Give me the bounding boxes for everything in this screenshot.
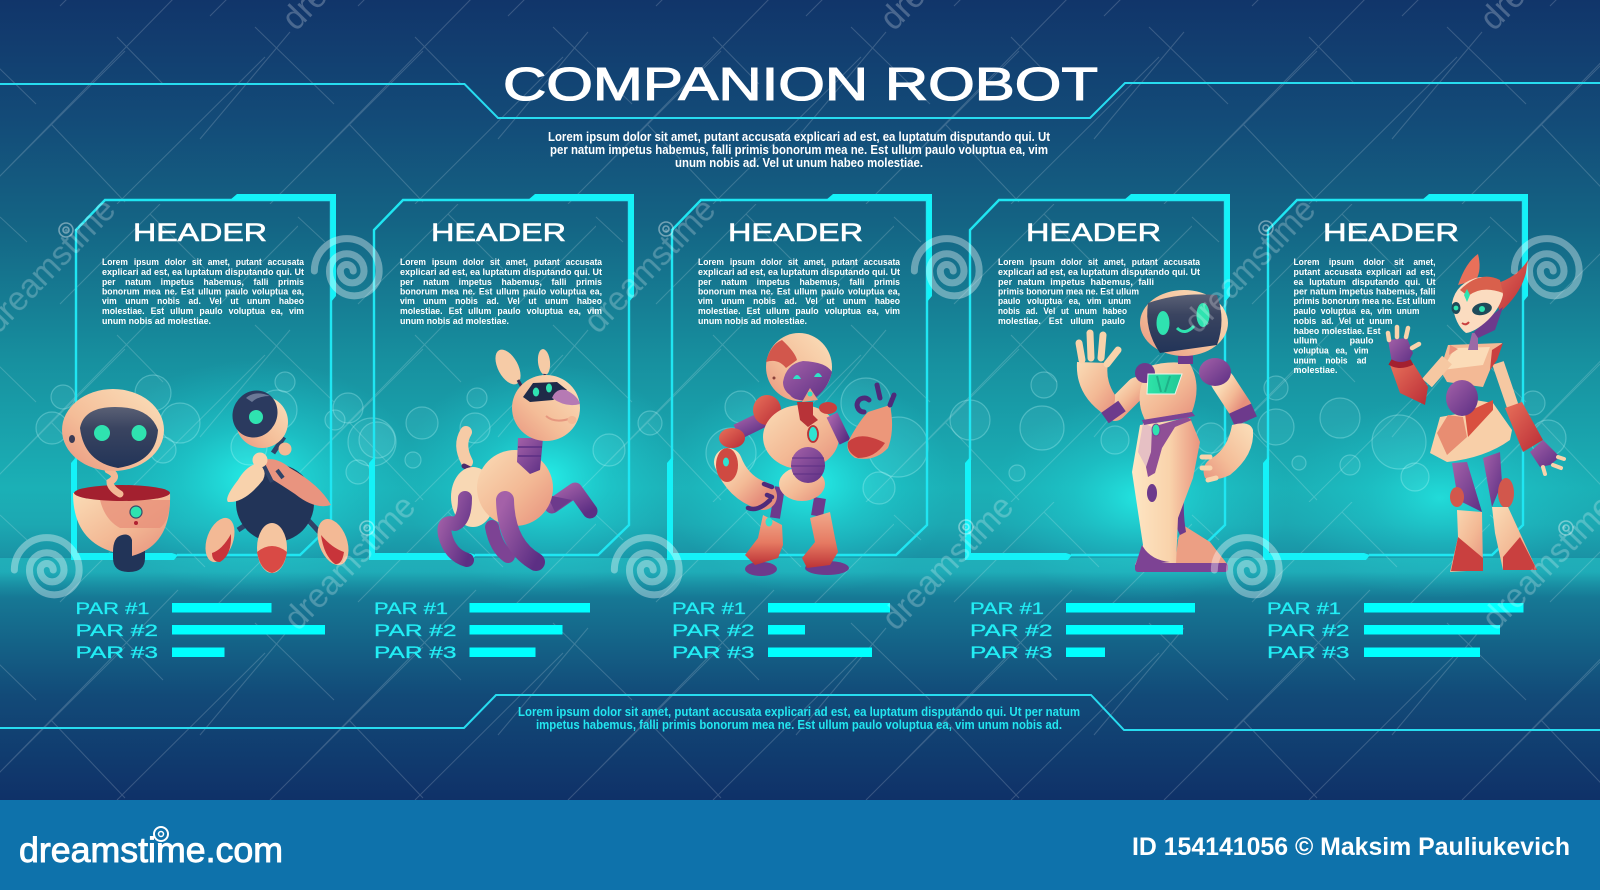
head xyxy=(1140,290,1228,356)
footer logo: dreamstime.com xyxy=(19,831,283,870)
panel 5: text block: putant accusata explicari ad est, xyxy=(1294,267,1436,278)
panel 4: header: HEADER xyxy=(1026,219,1161,247)
panel 3: text block: molestiae. Est ullum paulo voluptua ea, vim xyxy=(698,306,900,317)
panel 1: text block xyxy=(102,257,305,327)
hips xyxy=(779,467,825,501)
wheel xyxy=(113,530,145,572)
panel 2: text block xyxy=(400,257,603,327)
right arm xyxy=(1223,382,1240,408)
panel 4: text block: explicari ad est, ea luptatum disputando qui. Ut xyxy=(998,267,1201,278)
bokeh circles xyxy=(36,372,1566,504)
shell wings xyxy=(260,459,331,506)
panel 5: parameter chart: PAR #3 xyxy=(1267,643,1350,662)
panel 2: text block: vim unum nobis ad. Vel ut unum habeo xyxy=(400,296,602,307)
skirt xyxy=(1430,400,1512,462)
ears xyxy=(1458,254,1480,285)
panel 1: header: HEADER xyxy=(133,219,267,247)
panel 2: text block: explicari ad est, ea luptatum disputando qui. Ut xyxy=(400,267,603,278)
head xyxy=(1474,307,1503,338)
panel 4: parameter chart: PAR #1 xyxy=(970,599,1044,618)
legs xyxy=(238,515,322,548)
panel 1: parameter chart: PAR #2 xyxy=(76,621,158,640)
bottom text: Lorem ipsum dolor sit amet, putant accusata explicari ad est, ea luptatum disputando qui. Ut per natum xyxy=(518,705,1080,719)
panel 5: text block: voluptua ea, vim xyxy=(1294,346,1368,356)
panel 3: parameter chart xyxy=(672,599,890,662)
panel 2: parameter chart: PAR #1 xyxy=(374,599,448,618)
panel 5: text block: ea luptatum disputando qui. Ut xyxy=(1294,277,1436,288)
panel 5: text block: nobis ad. Vel ut unum xyxy=(1294,316,1392,327)
panel 1: text block: molestiae. Est ullum paulo voluptua ea, vim xyxy=(102,306,304,317)
panel 3: text block: per natum impetus habemus, falli primis xyxy=(698,277,900,288)
bottom text: impetus habemus, falli primis bonorum mea ne. Est ullum paulo voluptua ea, vim unum nobis ad. xyxy=(536,718,1062,732)
panel 3: text block xyxy=(698,257,901,327)
panel 5: text block: paulo voluptua ea, vim unum xyxy=(1294,306,1420,317)
neck xyxy=(108,470,120,494)
panel 5: text block: habeo molestiae. Est xyxy=(1294,326,1381,337)
panel 1: parameter chart xyxy=(76,599,325,662)
panel 1: text block: Lorem ipsum dolor sit amet, putant accusata xyxy=(102,257,305,268)
panel 4: text block: primis bonorum mea ne. Est ullum xyxy=(998,286,1139,298)
panel 2: header: HEADER xyxy=(431,219,566,247)
head xyxy=(512,375,580,441)
panel 1: text block: bonorum mea ne. Est ullum paulo voluptua ea, xyxy=(102,286,304,298)
body xyxy=(236,464,314,542)
neck xyxy=(1178,348,1193,364)
panel 1: parameter chart: PAR #3 xyxy=(76,643,158,662)
watermark wordmarks: dreamstime xyxy=(276,487,423,638)
panel 4: text block: per natum impetus habemus, falli xyxy=(998,277,1154,288)
panel 5: frame xyxy=(1263,194,1528,560)
panel 4: text block: Lorem ipsum dolor sit amet, putant accusata xyxy=(998,257,1201,268)
floor light band xyxy=(0,558,1600,598)
background glows xyxy=(90,360,1600,603)
robot 2: robot dog xyxy=(444,346,590,562)
panel 1: text block: vim unum nobis ad. Vel ut unum habeo xyxy=(102,296,304,307)
torso xyxy=(1440,343,1502,387)
robot 3: humanoid robot xyxy=(716,333,894,576)
panel 2: frame xyxy=(369,194,634,560)
feet xyxy=(200,514,240,566)
panel 5: text block xyxy=(1294,257,1436,376)
panel 4: frame xyxy=(965,194,1230,560)
lower body xyxy=(1175,525,1228,565)
panel 2: text block: Lorem ipsum dolor sit amet, putant accusata xyxy=(400,257,603,268)
panel 4: text block: paulo voluptua ea, vim unum xyxy=(998,296,1131,307)
panel 2: parameter chart: PAR #3 xyxy=(374,643,456,662)
panel 4: text block: molestiae. Est ullum paulo xyxy=(998,316,1125,327)
panel 2: text block: bonorum mea ne. Est ullum paulo voluptua ea, xyxy=(400,286,602,298)
panel 5: text block: ullum paulo xyxy=(1294,336,1374,346)
right arm xyxy=(1498,363,1513,407)
head xyxy=(766,333,832,401)
watermark wordmarks: dreamstime xyxy=(874,487,1021,638)
panel 1: text block: per natum impetus habemus, falli primis xyxy=(102,277,304,288)
bottom text xyxy=(518,705,1080,732)
ears xyxy=(490,346,526,388)
panel 1: text block: explicari ad est, ea luptatum disputando qui. Ut xyxy=(102,267,305,278)
panel 5: header: HEADER xyxy=(1323,219,1459,247)
left arm xyxy=(1427,360,1447,383)
head xyxy=(236,396,288,448)
torso xyxy=(763,405,839,469)
intro text xyxy=(548,130,1051,170)
neck xyxy=(517,438,543,474)
robot 1b: spider robot xyxy=(200,382,354,573)
near legs xyxy=(505,500,536,562)
panel 3: parameter chart: PAR #3 xyxy=(672,643,754,662)
panel 2: text block: unum nobis ad molestiae. xyxy=(400,316,509,327)
panel 4: parameter chart xyxy=(970,599,1195,662)
panel 3: text block: unum nobis ad molestiae. xyxy=(698,316,807,327)
panel 3: header: HEADER xyxy=(728,219,863,247)
panel 5: text block: molestiae. xyxy=(1294,365,1338,376)
watermark wordmarks: dreamstime xyxy=(1176,190,1323,341)
head xyxy=(62,389,164,471)
panel 2: parameter chart: PAR #2 xyxy=(374,621,456,640)
panel 5: parameter chart xyxy=(1267,599,1524,662)
torso xyxy=(1140,362,1197,420)
robot 5: female android xyxy=(1388,254,1564,572)
intro text: per natum impetus habemus, falli primis bonorum mea ne. Est ullum paulo voluptua ea, vim xyxy=(550,143,1048,157)
panel 1: parameter chart: PAR #1 xyxy=(76,599,150,618)
far legs xyxy=(492,527,508,556)
neck xyxy=(273,437,284,453)
panel 5: text block: unum nobis ad xyxy=(1294,356,1367,366)
body xyxy=(451,467,495,527)
footer bar xyxy=(0,800,1600,890)
panel 3: text block: bonorum mea ne. Est ullum paulo voluptua ea, xyxy=(698,286,900,298)
panel 3: text block: vim unum nobis ad. Vel ut unum habeo xyxy=(698,296,900,307)
panel 4: text block xyxy=(998,257,1201,327)
watermark spirals xyxy=(14,0,1579,595)
bottom frame line xyxy=(0,695,1600,730)
legs xyxy=(1452,462,1482,512)
watermark wordmarks: dreamstime xyxy=(576,190,723,341)
title: COMPANION ROBOT xyxy=(503,58,1098,110)
panel 3: parameter chart: PAR #2 xyxy=(672,621,754,640)
panel 4: text block: nobis ad. Vel ut unum habeo xyxy=(998,306,1127,317)
watermark wordmarks xyxy=(0,0,1600,638)
robot 1a: wheeled ball robot xyxy=(62,389,170,572)
robot 4: tall screen-face robot xyxy=(1077,290,1254,572)
panel 5: parameter chart: PAR #2 xyxy=(1267,621,1350,640)
intro text: unum nobis ad. Vel ut unum habeo molestiae. xyxy=(675,156,923,170)
panel 2: text block: per natum impetus habemus, falli primis xyxy=(400,277,602,288)
legs xyxy=(775,487,780,518)
tail xyxy=(462,432,467,462)
watermark small logo spirals xyxy=(59,221,1573,535)
panel 2: text block: molestiae. Est ullum paulo voluptua ea, vim xyxy=(400,306,602,317)
cup body xyxy=(73,493,170,556)
panel 4: parameter chart: PAR #3 xyxy=(970,643,1052,662)
panel 3: parameter chart: PAR #1 xyxy=(672,599,746,618)
panel 3: text block: Lorem ipsum dolor sit amet, putant accusata xyxy=(698,257,901,268)
panel 1: text block: unum nobis ad molestiae. xyxy=(102,316,211,327)
panel 5: text block: primis bonorum mea ne. Est ullum xyxy=(1294,296,1436,307)
waist xyxy=(1142,412,1195,425)
panel 5: text block: Lorem ipsum dolor sit amet, xyxy=(1294,257,1436,268)
right arm xyxy=(832,415,845,442)
panel 4: parameter chart: PAR #2 xyxy=(970,621,1052,640)
panel 3: frame xyxy=(667,194,932,560)
panel 5: text block: per natum impetus habemus, falli xyxy=(1294,286,1436,298)
hand xyxy=(1079,333,1118,364)
left arm xyxy=(1115,388,1137,410)
left arm xyxy=(737,417,768,432)
panel 5: parameter chart: PAR #1 xyxy=(1267,599,1341,618)
footer credit: ID 154141056 © Maksim Pauliukevich xyxy=(1132,833,1570,861)
panel 2: parameter chart xyxy=(374,599,590,662)
panel 1: frame xyxy=(71,194,336,560)
title frame line xyxy=(0,83,1600,118)
panel 3: text block: explicari ad est, ea luptatum disputando qui. Ut xyxy=(698,267,901,278)
intro text: Lorem ipsum dolor sit amet, putant accusata explicari ad est, ea luptatum disputando qui. Ut xyxy=(548,130,1051,144)
neck xyxy=(1468,333,1478,350)
